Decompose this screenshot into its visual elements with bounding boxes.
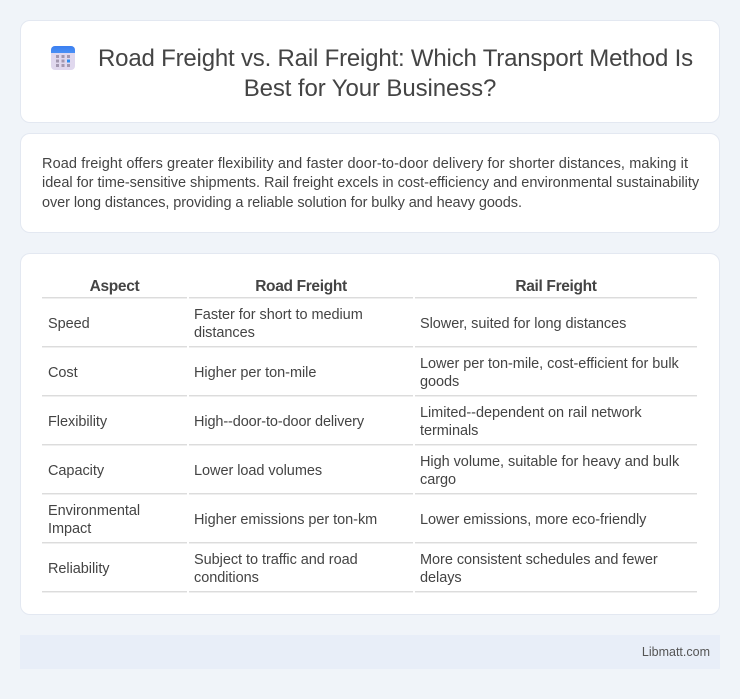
row: flexibility	[48, 405, 642, 439]
icon: calendar	[51, 46, 75, 70]
row: cost: Cost	[48, 365, 78, 381]
row: environmental impact: Impact	[48, 521, 91, 537]
row: speed: Faster for short to medium	[194, 307, 363, 323]
table header: Road Freight	[255, 278, 347, 295]
row: reliability	[48, 552, 658, 586]
footer credit: Libmatt.com	[642, 645, 710, 659]
row: environmental impact: Environmental	[48, 503, 140, 519]
row: capacity: Capacity	[48, 463, 104, 479]
row: reliability: Reliability	[48, 561, 110, 577]
row: cost: Lower per ton-mile, cost-efficient for bulk	[420, 356, 679, 372]
row: reliability: delays	[420, 570, 462, 586]
summary text: Road freight offers greater flexibility and faster door-to-door delivery for shorter distances, making it	[42, 156, 688, 172]
summary text	[42, 156, 700, 211]
panel: comparison table	[20, 253, 720, 615]
row: flexibility: Limited--dependent on rail network	[420, 405, 642, 421]
row: reliability: conditions	[194, 570, 259, 586]
panel: summary	[20, 133, 720, 233]
row: capacity	[48, 454, 680, 488]
row: flexibility: High--door-to-door delivery	[194, 414, 364, 430]
table header	[90, 278, 597, 295]
summary text: ideal for time-sensitive shipments. Rail freight excels in cost-efficiency and environmental sustainability	[42, 175, 699, 191]
row: reliability: Subject to traffic and road	[194, 552, 358, 568]
row: environmental impact: Lower emissions, more eco-friendly	[420, 512, 646, 528]
row: environmental impact: Higher emissions per ton-km	[194, 512, 377, 528]
title: Road Freight vs. Rail Freight: Which Transport Method Is	[98, 45, 693, 72]
row: cost: Higher per ton-mile	[194, 365, 316, 381]
row: speed: Speed	[48, 316, 90, 332]
row: capacity: High volume, suitable for heavy and bulk	[420, 454, 679, 470]
row: speed: Slower, suited for long distances	[420, 316, 626, 332]
row: flexibility: Flexibility	[48, 414, 107, 430]
title: Best for Your Business?	[244, 75, 496, 102]
panel: title card	[20, 20, 720, 123]
table header: Rail Freight	[515, 278, 597, 295]
row: cost	[48, 356, 679, 390]
title	[98, 45, 693, 102]
table header: Aspect	[90, 278, 139, 295]
row: environmental impact	[48, 503, 646, 537]
row: speed: distances	[194, 325, 255, 341]
row: flexibility: terminals	[420, 423, 478, 439]
summary text: over long distances, providing a reliable solution for bulky and heavy goods.	[42, 195, 522, 211]
row: capacity: Lower load volumes	[194, 463, 322, 479]
row: reliability: More consistent schedules and fewer	[420, 552, 658, 568]
row: cost: goods	[420, 374, 459, 390]
row: speed	[48, 307, 626, 341]
row: capacity: cargo	[420, 472, 456, 488]
footer bar	[20, 635, 720, 669]
